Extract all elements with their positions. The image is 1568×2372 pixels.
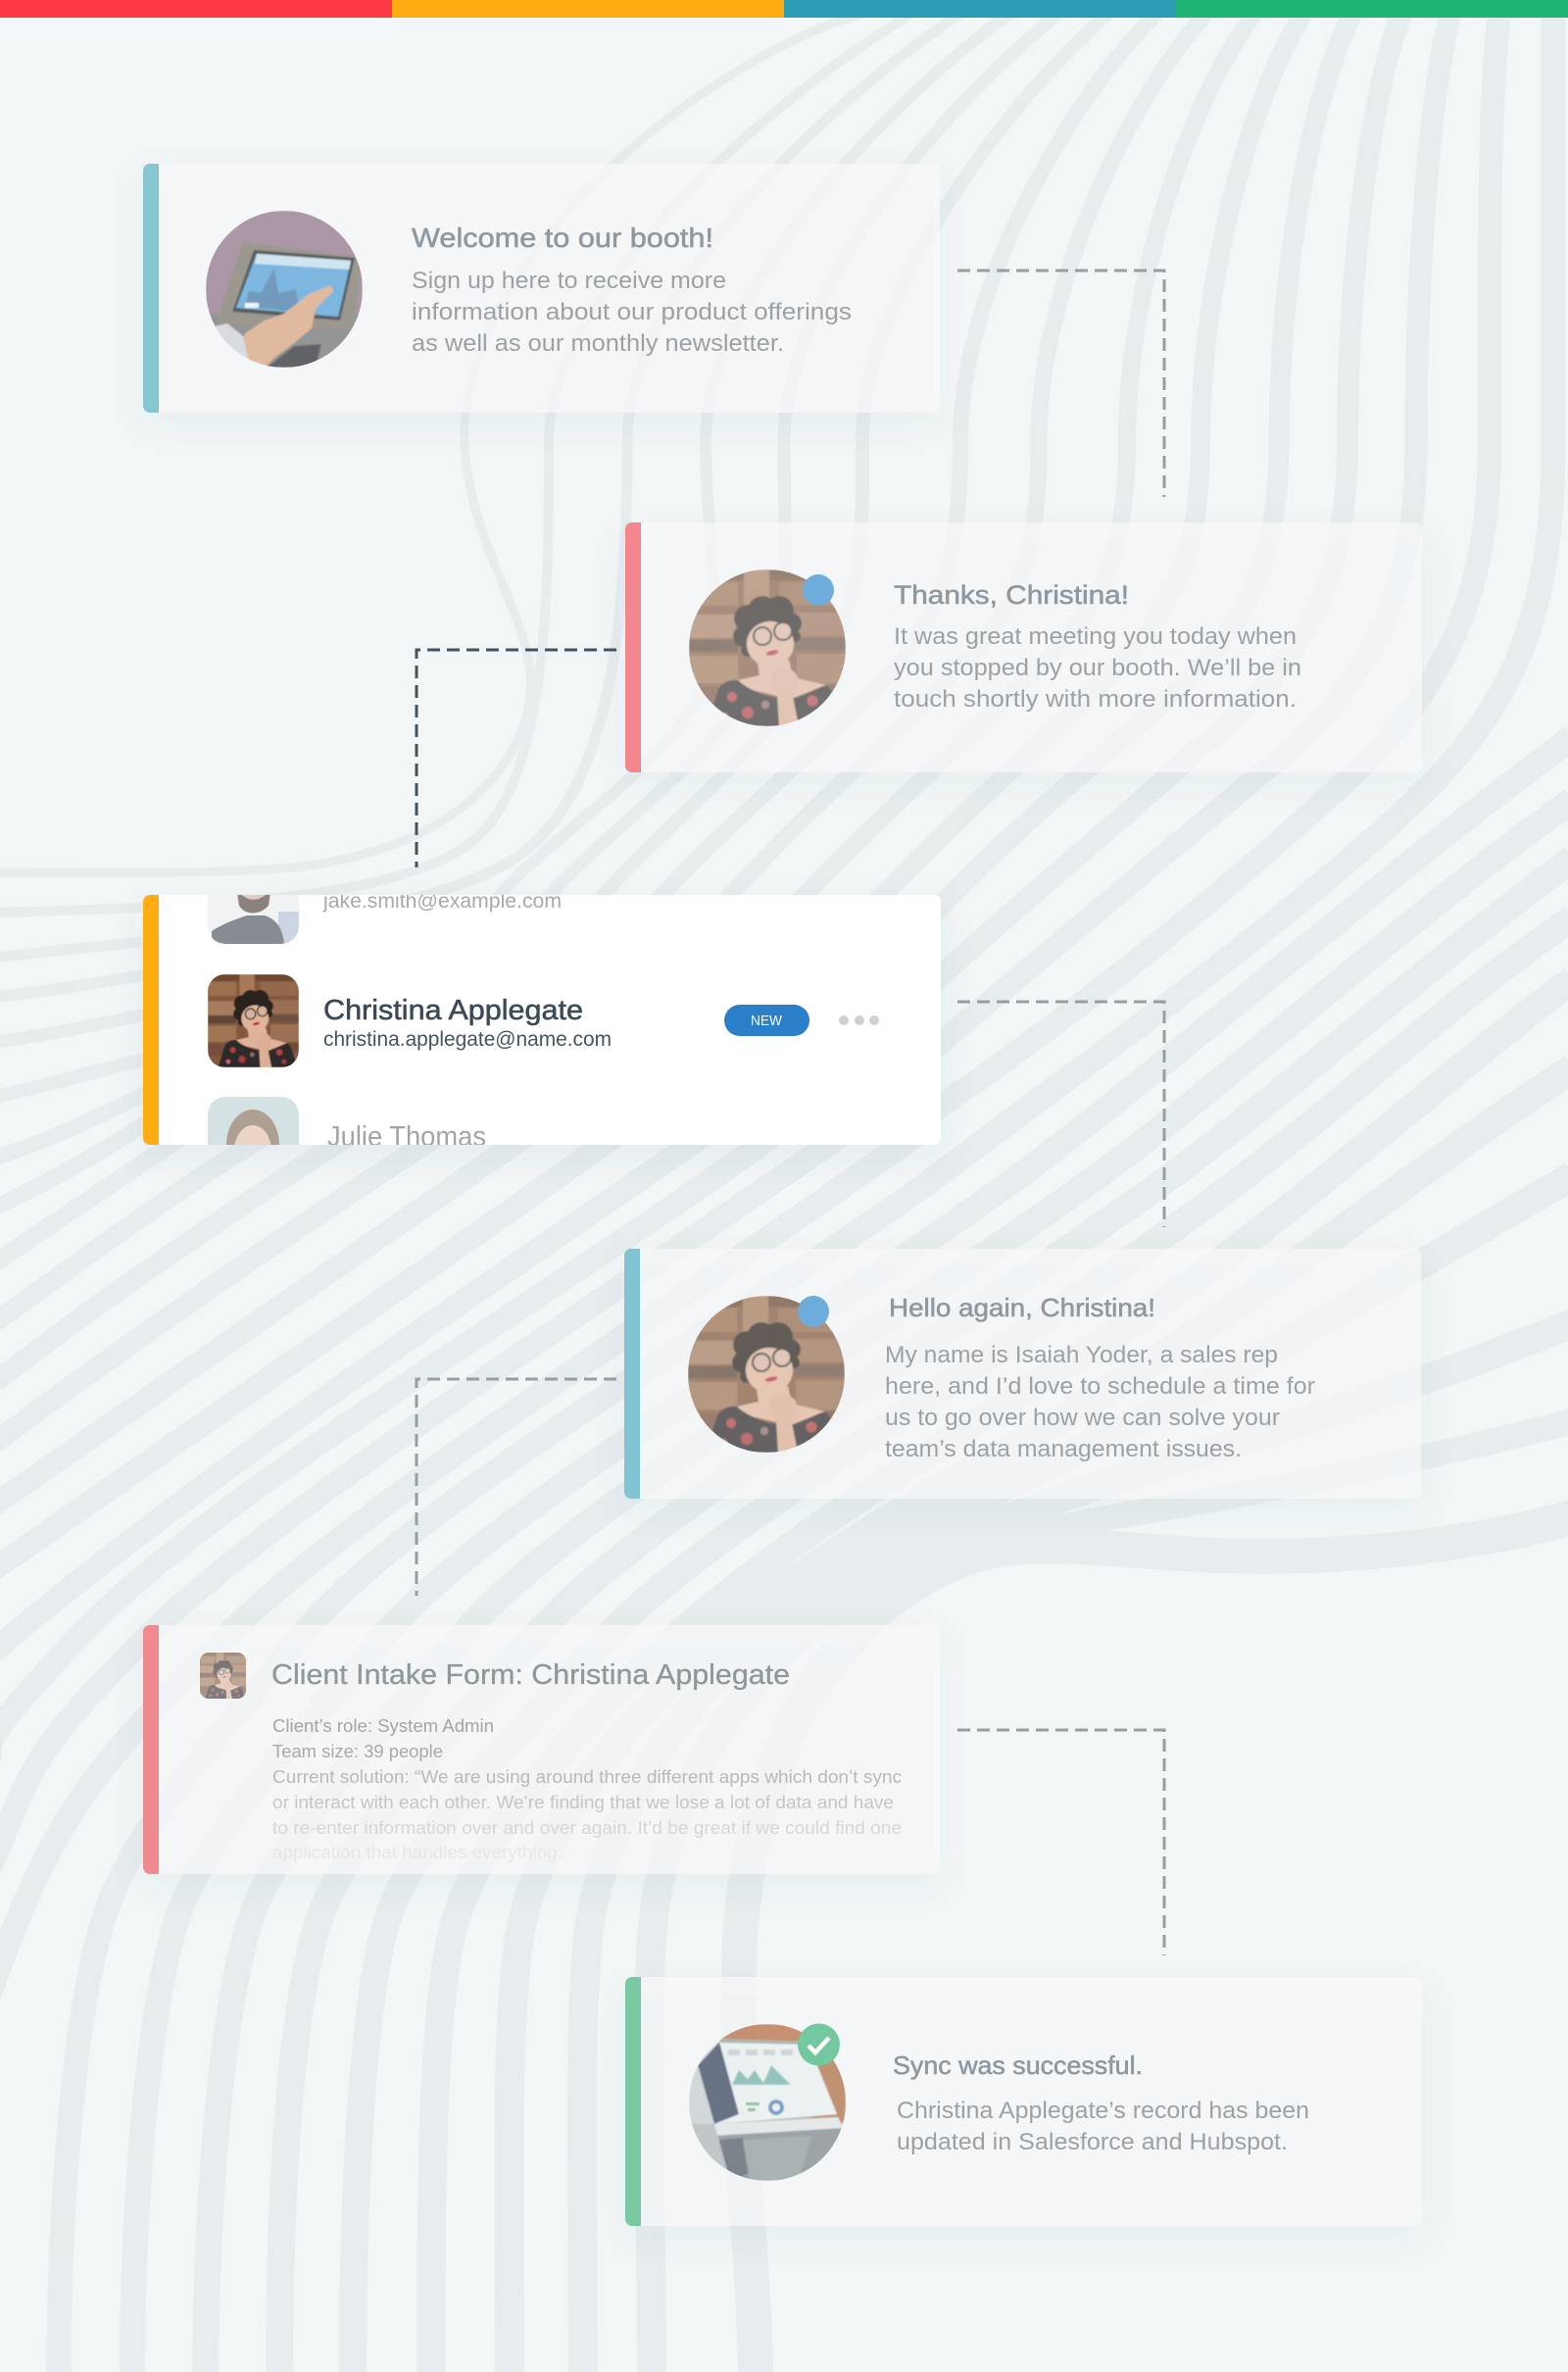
panel: sync success card — [625, 1977, 1422, 2226]
contact email: jake.smith@example.com — [322, 890, 562, 913]
contact email: christina.applegate@name.com — [323, 1028, 612, 1051]
connector: card 1 to card 2 — [957, 271, 1164, 497]
panel: welcome card — [143, 164, 940, 413]
body text: here, and I’d love to schedule a time for — [885, 1373, 1315, 1400]
body text: information about our product offerings — [412, 299, 852, 325]
icon: blue status dot — [803, 574, 834, 606]
icon: jake photo — [208, 895, 299, 944]
body text — [894, 623, 1301, 713]
body text — [885, 1342, 1315, 1462]
heading: Thanks, Christina! — [894, 580, 1129, 610]
icon: green check badge — [798, 2023, 840, 2066]
icon: christina photo — [208, 974, 299, 1067]
body text: My name is Isaiah Yoder, a sales rep — [885, 1342, 1278, 1368]
connector: card 2 to card 3 — [416, 650, 616, 867]
body text — [412, 268, 852, 357]
panel: hello again card — [624, 1249, 1421, 1499]
connector: card 5 to card 6 — [957, 1730, 1164, 1955]
heading: Sync was successful. — [893, 2051, 1143, 2080]
body text: Christina Applegate’s record has been — [897, 2098, 1309, 2124]
new badge — [724, 1005, 809, 1036]
icon: portrait photo — [689, 569, 846, 726]
panel: contact list card — [142, 895, 942, 1158]
icon: tablet photo — [206, 211, 363, 368]
body text: touch shortly with more information. — [894, 686, 1297, 713]
heading: Welcome to our booth! — [412, 222, 713, 253]
body text: It was great meeting you today when — [894, 623, 1297, 650]
form details: application that handles everything. — [272, 1842, 563, 1862]
form details: Team size: 39 people — [272, 1741, 443, 1761]
icon: laptop dashboard photo — [689, 2024, 846, 2181]
body text: updated in Salesforce and Hubspot. — [897, 2129, 1288, 2155]
icon: small portrait — [200, 1653, 246, 1699]
icon: julie photo — [208, 1097, 299, 1145]
form details: Client’s role: System Admin — [272, 1715, 494, 1736]
body text: as well as our monthly newsletter. — [412, 330, 784, 357]
panel: thanks card — [625, 522, 1422, 772]
connector: card 4 to card 5 — [416, 1379, 616, 1596]
icon: portrait photo — [688, 1296, 845, 1453]
new badge: NEW — [751, 1013, 782, 1029]
contact rows — [208, 895, 879, 1145]
contact name: Christina Applegate — [323, 995, 583, 1026]
body text — [897, 2098, 1309, 2155]
heading: Client Intake Form: Christina Applegate — [271, 1659, 790, 1691]
body text: Sign up here to receive more — [412, 268, 726, 294]
form details: or interact with each other. We’re finding that we lose a lot of data and have — [272, 1792, 894, 1812]
body text: us to go over how we can solve your — [885, 1405, 1280, 1431]
top colour bar — [0, 0, 1568, 18]
body text: you stopped by our booth. We’ll be in — [894, 655, 1301, 681]
icon: more dots — [839, 1015, 879, 1025]
contact name: Julie Thomas — [327, 1121, 486, 1153]
form details: Current solution: “We are using around three different apps which don’t sync — [272, 1766, 902, 1787]
connector: card 3 to card 4 — [957, 1002, 1164, 1227]
heading: Hello again, Christina! — [889, 1293, 1155, 1322]
panel: client intake form card — [143, 1625, 940, 1874]
icon: blue status dot — [798, 1296, 829, 1327]
form details — [272, 1715, 902, 1862]
body text: team’s data management issues. — [885, 1436, 1242, 1462]
form details: to re-enter information over and over again. It’d be great if we could find one — [272, 1817, 902, 1838]
